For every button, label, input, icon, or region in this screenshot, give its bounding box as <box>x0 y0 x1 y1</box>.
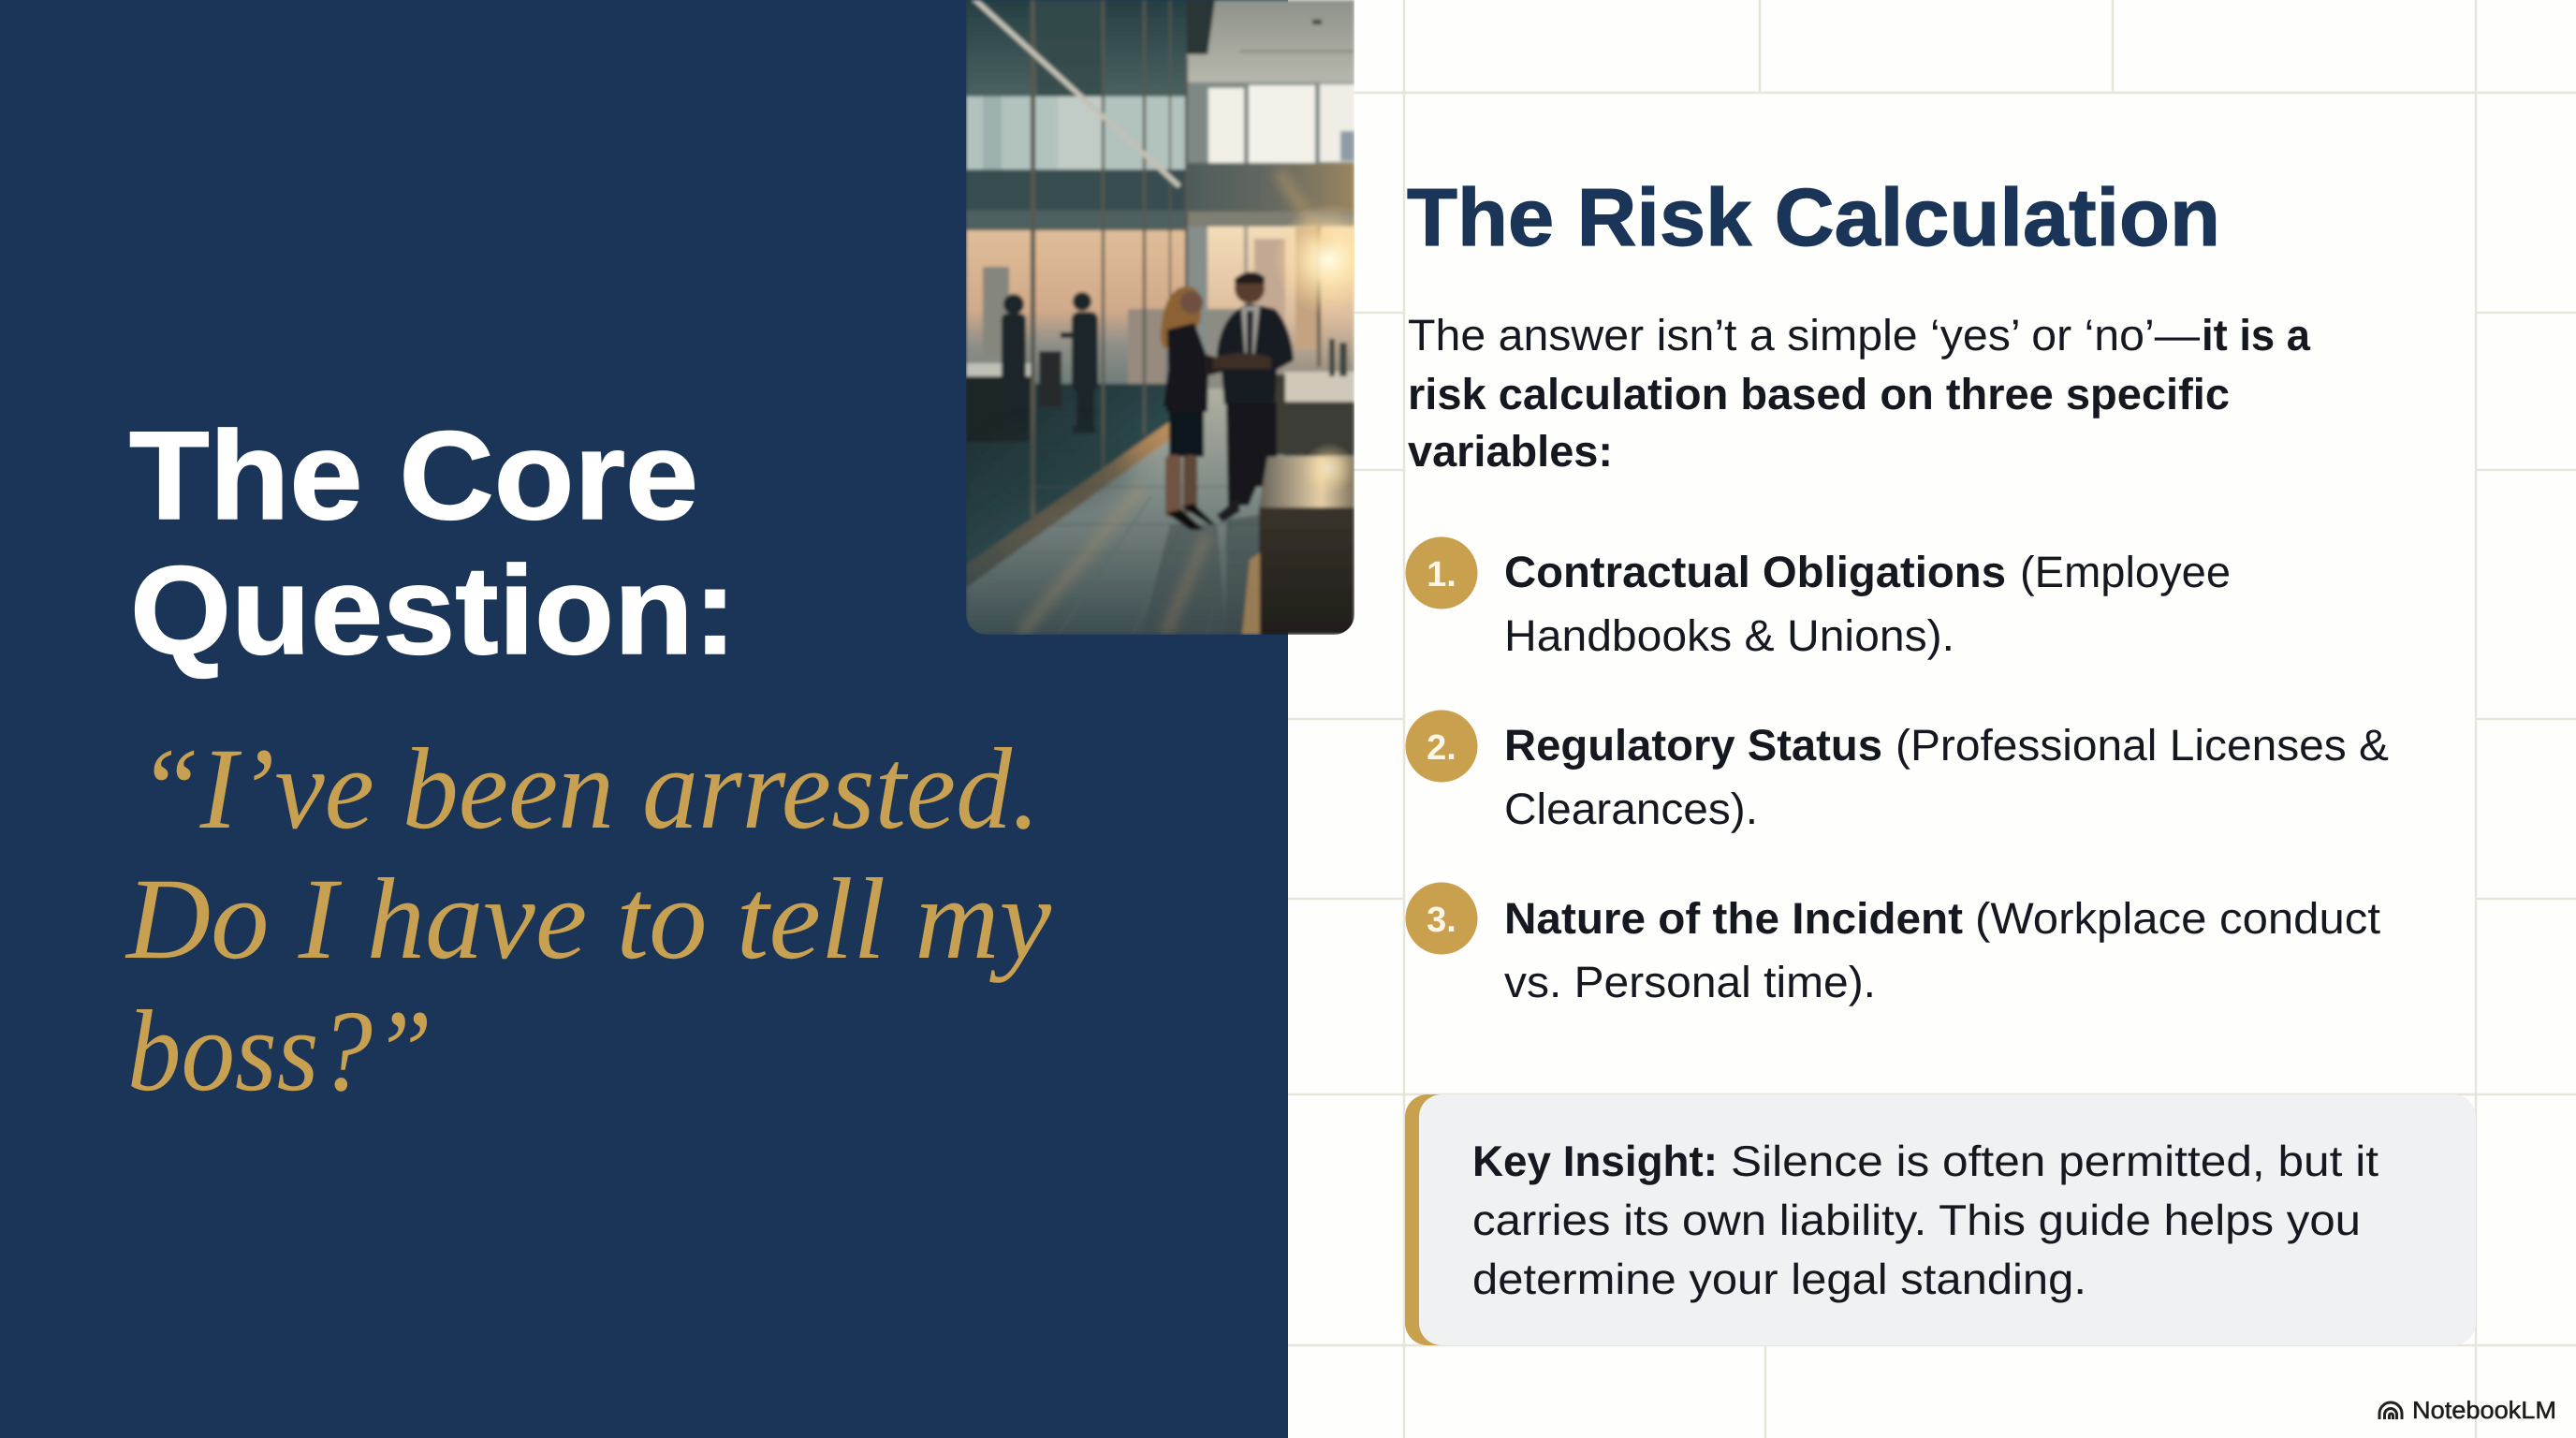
title: The Core Question: Question: <box>130 541 737 681</box>
lower windows <box>1205 224 1354 377</box>
intro paragraph: it is a <box>2202 310 2311 360</box>
man <box>1235 273 1265 303</box>
badge 2: 2. <box>1427 728 1456 768</box>
warm floor streaks <box>1020 487 1208 635</box>
callout: key insight: Key Insight: <box>1472 1137 1718 1185</box>
upper windows <box>1187 82 1354 165</box>
beam <box>1187 161 1354 213</box>
ceiling <box>1187 0 1354 86</box>
intro paragraph: risk calculation based on three specific <box>1408 369 2230 418</box>
heading: The Risk Calculation: The Risk Calculation <box>1407 172 2220 263</box>
icon: NotebookLM logo arcs <box>2379 1402 2402 1419</box>
badge 2 <box>1406 710 1477 783</box>
photo: business people talking in a glass office at sunset <box>966 0 1385 635</box>
list item 2: Regulatory Status <box>1406 710 2389 833</box>
list item 2: Regulatory Status: (Professional Licenses & <box>1895 720 2389 770</box>
floor <box>966 389 1354 635</box>
badge 3: 3. <box>1427 901 1456 940</box>
title: The Core Question <box>129 406 737 681</box>
quote in gold italic serif: boss?” <box>127 987 432 1115</box>
badge 3 <box>1406 882 1477 955</box>
callout: key insight: carries its own liability. This guide helps you <box>1472 1196 2361 1244</box>
quote in gold italic serif: “I’ve been arrested. <box>138 725 1040 853</box>
list item 2: Regulatory Status: Clearances). <box>1504 784 1758 833</box>
callout: key insight: Silence is often permitted, but it <box>1731 1137 2378 1185</box>
foreground cabinet <box>1259 457 1354 507</box>
title: The Core Question: The Core <box>129 406 698 546</box>
quote in gold italic serif <box>124 725 1052 1115</box>
callout: key insight: determine your legal standing. <box>1472 1255 2086 1303</box>
dark reflection under people <box>1151 521 1222 615</box>
left glass wall <box>966 0 1188 75</box>
intro paragraph <box>1408 310 2311 476</box>
badge 1 <box>1406 537 1477 609</box>
list item 3: Nature of the Incident: vs. Personal time). <box>1504 957 1876 1006</box>
reflected figures <box>1002 292 1098 433</box>
watermark: NotebookLM: NotebookLM <box>2412 1396 2556 1424</box>
list item 1: Contractual Obligations: Contractual Obligations <box>1504 547 2006 596</box>
list item 1: Contractual Obligations <box>1406 537 2231 660</box>
woman <box>1161 286 1201 348</box>
list item 3: Nature of the Incident <box>1406 882 2380 1006</box>
intro paragraph: variables: <box>1408 426 1613 476</box>
quote in gold italic serif: Do I have to tell my <box>124 855 1052 983</box>
glass frames <box>1031 0 1188 517</box>
panel: navy left background <box>0 0 1288 1438</box>
list item 1: Contractual Obligations: Handbooks & Unions). <box>1504 610 1954 660</box>
sun glow <box>1279 206 1354 311</box>
list item 2: Regulatory Status: Regulatory Status <box>1504 720 1882 770</box>
intro paragraph: The answer isn’t a simple ‘yes’ or ‘no’— <box>1408 310 2200 360</box>
badge 1: 1. <box>1427 555 1456 594</box>
list item 3: Nature of the Incident: Nature of the Incident <box>1504 893 1963 943</box>
desk <box>1284 372 1354 403</box>
list item 3: Nature of the Incident: (Workplace conduct <box>1975 893 2380 943</box>
list item 1: Contractual Obligations: (Employee <box>2020 547 2231 596</box>
callout: key insight <box>1405 1094 2476 1345</box>
